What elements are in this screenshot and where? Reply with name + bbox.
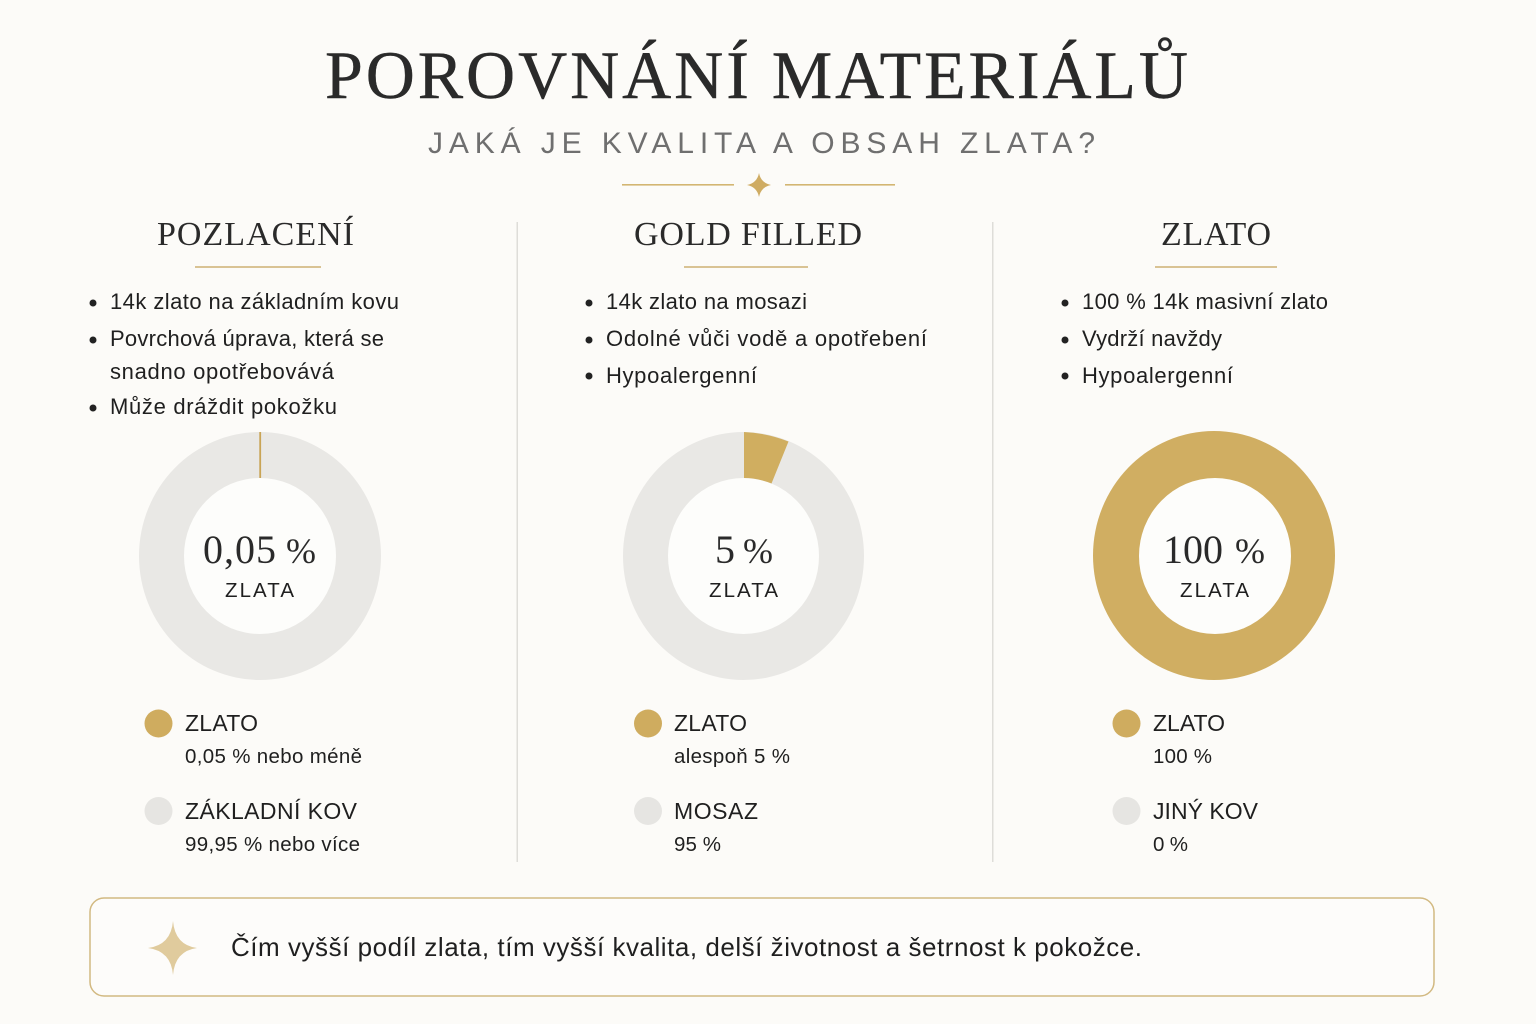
legend: Pozlacení [144,710,362,856]
donut chart: 5 % [623,432,864,680]
legend: Gold Filled: alespoň 5 % [674,745,790,768]
title ornament [622,173,895,197]
donut chart: 5 %: 5 [715,527,735,572]
subtitle: JAKÁ JE KVALITA A OBSAH ZLATA? [428,127,1095,160]
bullet list: Gold Filled: Odolné vůči vodě a opotřebení [606,326,927,351]
donut chart: 100 % [1093,431,1335,680]
donut chart: 100 %: 100 [1163,527,1223,572]
donut chart: 0,05 %: ZLATA [225,579,294,602]
legend: Zlato: ZLATO [1153,710,1225,736]
callout [90,898,1434,996]
callout text: Čím vyšší podíl zlata, tím vyšší kvalita, delší životnost a šetrnost k pokožce. [231,932,1142,962]
bullet list: Gold Filled: Hypoalergenní [606,363,757,388]
title: POROVNÁNÍ MATERIÁLŮ [325,37,1188,113]
donut chart: 0,05 %: 0,05 [203,527,276,572]
bullet list: Zlato: 100 % 14k masivní zlato [1082,289,1328,314]
panel: Zlato [1062,216,1335,856]
legend: Gold Filled: ZLATO [674,710,747,736]
panel: Gold Filled [586,216,927,856]
legend: Gold Filled: MOSAZ [674,798,758,824]
legend: Zlato [1112,710,1259,856]
donut chart: 0,05 %: % [286,531,316,571]
bullet list: Pozlacení: Povrchová úprava, která se [110,326,384,351]
bullet list: Gold Filled [586,289,927,388]
heading: Gold Filled: GOLD FILLED [634,216,862,253]
bullet list: Gold Filled: 14k zlato na mosazi [606,289,807,314]
bullet list: Zlato [1062,289,1328,388]
bullet list: Pozlacení: Může dráždit pokožku [110,394,337,419]
icon: sparkle [148,921,197,975]
legend: Pozlacení: 0,05 % nebo méně [185,745,362,768]
donut chart: 5 %: ZLATA [709,579,778,602]
heading: Pozlacení: POZLACENÍ [157,216,354,253]
donut chart: 100 %: % [1235,531,1265,571]
donut chart: 100 %: ZLATA [1180,579,1249,602]
donut chart: 0,05 % [139,432,381,680]
legend: Zlato: 0 % [1153,833,1188,856]
donut chart: 5 %: % [743,531,773,571]
bullet list: Pozlacení [90,289,399,419]
bullet list: Pozlacení: snadno opotřebovává [110,359,335,384]
legend: Pozlacení: ZÁKLADNÍ KOV [185,798,358,824]
legend: Zlato: JINÝ KOV [1153,798,1259,824]
heading: Zlato: ZLATO [1161,216,1271,253]
panel: Pozlacení [90,216,399,856]
legend: Zlato: 100 % [1153,745,1212,768]
bullet list: Zlato: Vydrží navždy [1082,326,1222,351]
legend: Gold Filled [634,710,790,856]
bullet list: Pozlacení: 14k zlato na základním kovu [110,289,399,314]
legend: Gold Filled: 95 % [674,833,721,856]
legend: Pozlacení: ZLATO [185,710,258,736]
bullet list: Zlato: Hypoalergenní [1082,363,1233,388]
legend: Pozlacení: 99,95 % nebo více [185,833,360,856]
